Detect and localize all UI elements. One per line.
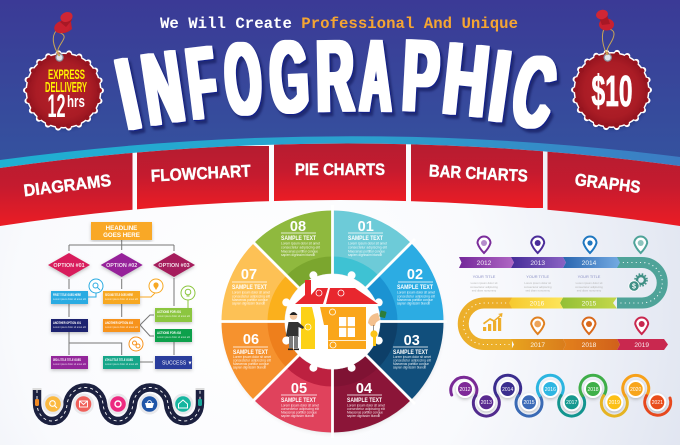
cars bbox=[35, 399, 202, 406]
flowchart bbox=[48, 222, 195, 369]
flowchart boxes: Lorem ipsum dolor sit amet elit bbox=[157, 335, 190, 339]
labels 04: 04 bbox=[356, 381, 372, 397]
snake arcs bbox=[451, 375, 671, 416]
labels 02 bbox=[397, 267, 435, 306]
circular pie chart bbox=[218, 205, 447, 438]
option diamonds: OPTION #03 bbox=[158, 263, 190, 269]
year disc labels: 2013 bbox=[481, 400, 492, 406]
labels 06: SAMPLE TEXT bbox=[233, 349, 268, 356]
bar segments bbox=[459, 257, 668, 350]
labels 03: Maecenas porttitor congue bbox=[393, 362, 429, 366]
labels 08 bbox=[281, 219, 320, 257]
ribbon labels bbox=[22, 160, 642, 200]
labels 06: Maecenas porttitor congue bbox=[233, 362, 269, 366]
segment 01 bbox=[332, 210, 411, 288]
year labels bbox=[477, 260, 649, 349]
flowchart boxes: Lorem ipsum dolor sit amet elit bbox=[105, 325, 138, 329]
labels 03: 03 bbox=[404, 333, 420, 349]
segment 03 bbox=[366, 322, 444, 400]
year disc labels: 2018 bbox=[587, 387, 599, 393]
title: INFOGRAPHIC: F bbox=[181, 25, 223, 141]
title: INFOGRAPHIC bbox=[107, 18, 564, 152]
title: INFOGRAPHIC: N bbox=[136, 30, 190, 148]
house roof bbox=[295, 280, 378, 304]
tag: price: $10 bbox=[592, 67, 632, 116]
flowchart boxes: ACTIONS FOR #02 bbox=[157, 331, 181, 335]
road dashes bbox=[37, 388, 200, 421]
headline box: HEADLINE bbox=[106, 225, 137, 232]
title: INFOGRAPHIC: P bbox=[400, 19, 442, 134]
labels 07: 07 bbox=[241, 267, 257, 283]
title: INFOGRAPHIC: I bbox=[483, 28, 517, 143]
flowchart boxes: Lorem ipsum dolor sit amet elit bbox=[105, 297, 138, 301]
your title captions: Lorem ipsum dolor sit bbox=[471, 281, 498, 285]
title: INFOGRAPHIC: H bbox=[438, 20, 494, 139]
blue header background bbox=[0, 0, 680, 166]
labels 07 bbox=[232, 267, 270, 306]
ribbon labels: BAR CHARTS bbox=[428, 161, 528, 186]
title: INFOGRAPHIC: A bbox=[360, 18, 392, 133]
your title captions: consectetur adipiscing bbox=[524, 285, 552, 289]
labels 02: consectetur adipiscing elit bbox=[397, 294, 435, 298]
labels 08: SAMPLE TEXT bbox=[281, 235, 316, 242]
headline box: GOES HERE bbox=[103, 232, 140, 239]
year disc labels: 2017 bbox=[566, 400, 577, 406]
flowchart boxes: SECOND TITLE GOES HERE bbox=[105, 293, 133, 297]
road timeline years 2012-2019 bbox=[459, 236, 668, 350]
labels 02: sapien dignissim blandit bbox=[397, 302, 430, 306]
labels 07: SAMPLE TEXT bbox=[232, 284, 267, 291]
flowchart boxes: ANOTHER OPTION #02 bbox=[105, 321, 133, 325]
segment 02 bbox=[366, 243, 444, 322]
teal road curve bbox=[617, 262, 662, 303]
labels 02: Lorem ipsum dolor sit amet bbox=[397, 290, 435, 294]
road bbox=[37, 388, 200, 421]
spiral year timeline bbox=[451, 375, 671, 416]
labels 05: Lorem ipsum dolor sit amet bbox=[281, 404, 319, 408]
labels 04 bbox=[347, 381, 385, 418]
tag: express delivery: hrs bbox=[67, 92, 85, 111]
labels 03: consectetur adipiscing elit bbox=[393, 358, 431, 362]
year disc labels bbox=[459, 387, 663, 406]
labels 03: SAMPLE TEXT bbox=[393, 349, 428, 356]
year disc labels: 2020 bbox=[630, 387, 641, 393]
house illustration bbox=[286, 280, 387, 350]
segment 07 bbox=[222, 243, 299, 322]
flowchart boxes: FIRST TITLE GOES HERE bbox=[53, 293, 81, 297]
year disc labels: 2015 bbox=[523, 400, 535, 406]
option diamonds: OPTION #01 bbox=[53, 263, 85, 269]
year disc labels: 2019 bbox=[609, 400, 620, 406]
labels 01 bbox=[348, 219, 387, 257]
orange road curve bbox=[463, 303, 512, 344]
tag: express delivery bbox=[26, 10, 102, 129]
road stubs bbox=[32, 388, 204, 400]
flowchart boxes: Lorem ipsum dolor sit amet elit bbox=[53, 325, 86, 329]
year labels: 2018 bbox=[582, 342, 597, 349]
icon callouts bbox=[88, 279, 195, 351]
flowchart boxes: SUCCESS ▼ bbox=[162, 360, 193, 366]
title: INFOGRAPHIC: R bbox=[315, 20, 355, 134]
year disc labels: 2021 bbox=[652, 400, 663, 406]
title: INFOGRAPHIC: C bbox=[503, 33, 564, 152]
your title captions: sed diam nonummy bbox=[577, 288, 602, 292]
year disc labels: 2012 bbox=[459, 387, 471, 393]
labels 07: Lorem ipsum dolor sit amet bbox=[232, 290, 270, 294]
ribbon panels bbox=[0, 142, 680, 228]
icon: money and gear bbox=[629, 274, 647, 291]
teal arc band bbox=[0, 136, 680, 168]
labels 04: SAMPLE TEXT bbox=[347, 397, 382, 404]
icon: growth bar chart bbox=[483, 313, 502, 331]
option diamonds bbox=[48, 253, 195, 277]
year labels: 2015 bbox=[582, 300, 597, 308]
labels 05: SAMPLE TEXT bbox=[281, 397, 316, 404]
flowchart boxes: ACTIONS FOR #01 bbox=[157, 310, 181, 314]
labels 06 bbox=[233, 332, 271, 370]
your title captions: sed diam nonummy bbox=[472, 288, 497, 292]
title: INFOGRAPHIC: O bbox=[220, 20, 266, 137]
flowchart connectors bbox=[69, 240, 174, 362]
businessman bbox=[286, 312, 304, 350]
labels 01: consectetur adipiscing elit bbox=[348, 246, 387, 250]
labels 04: Maecenas porttitor congue bbox=[347, 410, 383, 414]
year labels: 2016 bbox=[530, 300, 545, 308]
title: INFOGRAPHIC: G bbox=[267, 19, 311, 135]
center gear disc bbox=[282, 271, 383, 372]
title: INFOGRAPHIC: I bbox=[107, 36, 148, 151]
labels 04: Lorem ipsum dolor sit amet bbox=[347, 404, 385, 408]
labels 01: SAMPLE TEXT bbox=[348, 235, 383, 242]
tag: express delivery: DELLIVERY bbox=[45, 80, 87, 96]
ribbon labels: PIE CHARTS bbox=[295, 160, 385, 179]
segment 08 bbox=[254, 210, 332, 288]
headline box bbox=[91, 222, 152, 240]
segment 04 bbox=[332, 355, 411, 432]
your title captions: Lorem ipsum dolor sit bbox=[576, 281, 603, 285]
labels 01: 01 bbox=[358, 219, 374, 235]
labels 06: sapien dignissim blandit bbox=[233, 366, 266, 370]
labels 05: 05 bbox=[291, 381, 307, 397]
tag: express delivery: EXPRESS bbox=[48, 66, 85, 82]
ribbon labels: FLOWCHART bbox=[150, 161, 252, 186]
labels 06: Lorem ipsum dolor sit amet bbox=[233, 355, 271, 359]
labels 01: sapien dignissim blandit bbox=[348, 253, 382, 257]
year discs bbox=[457, 381, 665, 410]
hand holding key bbox=[368, 310, 387, 346]
your title captions: YOUR TITLE bbox=[526, 274, 550, 279]
road timeline bbox=[32, 388, 204, 421]
flowchart boxes: 3RD LITTLE TITLE GOES bbox=[53, 358, 82, 362]
labels 06: consectetur adipiscing elit bbox=[233, 358, 271, 362]
icon: money and gear: $ bbox=[632, 284, 636, 290]
labels 04: consectetur adipiscing elit bbox=[347, 407, 385, 411]
labels 01: Maecenas porttitor congue bbox=[348, 250, 385, 254]
year labels: 2012 bbox=[477, 260, 492, 267]
labels 05: consectetur adipiscing elit bbox=[281, 407, 319, 411]
labels 03: Lorem ipsum dolor sit amet bbox=[393, 355, 431, 359]
labels 08: Lorem ipsum dolor sit amet bbox=[281, 242, 320, 246]
segment 06 bbox=[222, 322, 299, 400]
year labels: 2019 bbox=[634, 342, 649, 349]
ribbon labels: DIAGRAMS bbox=[22, 171, 112, 200]
your title captions: YOUR TITLE bbox=[473, 274, 496, 279]
inner darker bands bbox=[267, 256, 398, 387]
year disc labels: 2014 bbox=[502, 387, 513, 393]
location pins bbox=[478, 236, 648, 334]
icon: push pin left bbox=[52, 10, 74, 35]
year labels: 2017 bbox=[530, 342, 545, 349]
flowchart boxes: Lorem ipsum dolor sit amet elit bbox=[53, 297, 86, 301]
labels 08: Maecenas porttitor congue bbox=[281, 250, 318, 254]
tag: express delivery: 12 bbox=[48, 88, 66, 124]
labels 06: 06 bbox=[243, 332, 259, 348]
year disc labels: 2016 bbox=[545, 387, 556, 393]
tag: price bbox=[574, 9, 650, 129]
labels 05: sapien dignissim blandit bbox=[281, 414, 314, 418]
tagline: We Will Create Professional And Unique bbox=[160, 15, 518, 33]
flowchart boxes: Lorem ipsum dolor sit amet elit bbox=[53, 362, 86, 366]
labels 08: sapien dignissim blandit bbox=[281, 253, 315, 257]
segment 05 bbox=[254, 355, 332, 432]
labels 02: Maecenas porttitor congue bbox=[397, 298, 433, 302]
flowchart boxes: Lorem ipsum dolor sit amet elit bbox=[105, 362, 138, 366]
labels 03: sapien dignissim blandit bbox=[393, 366, 426, 370]
flowchart boxes: Lorem ipsum dolor sit amet elit bbox=[157, 314, 190, 318]
road stop icons bbox=[42, 394, 194, 414]
labels 08: 08 bbox=[290, 219, 306, 235]
labels 07: consectetur adipiscing elit bbox=[232, 294, 270, 298]
year labels: 2014 bbox=[582, 260, 597, 267]
labels 02: 02 bbox=[407, 267, 423, 283]
your title captions: YOUR TITLE bbox=[578, 274, 601, 279]
labels 05: Maecenas porttitor congue bbox=[281, 410, 317, 414]
labels 07: Maecenas porttitor congue bbox=[232, 298, 268, 302]
your title captions: Lorem ipsum dolor sit bbox=[524, 281, 551, 285]
labels 07: sapien dignissim blandit bbox=[232, 302, 265, 306]
flowchart boxes: 4TH LITTLE TITLE GOES bbox=[105, 358, 134, 362]
year labels: 2013 bbox=[530, 260, 545, 267]
flowchart boxes bbox=[51, 291, 193, 369]
labels 02: SAMPLE TEXT bbox=[397, 284, 433, 291]
house walls bbox=[301, 290, 366, 349]
your title captions: consectetur adipiscing bbox=[575, 285, 603, 289]
icon: push pin right bbox=[595, 9, 614, 30]
labels 05 bbox=[281, 381, 319, 418]
wheel shadow bbox=[222, 212, 444, 433]
flowchart boxes: ANOTHER OPTION #01 bbox=[53, 321, 81, 325]
labels 04: sapien dignissim blandit bbox=[347, 414, 380, 418]
ribbon labels: GRAPHS bbox=[574, 170, 642, 197]
your title captions: sed diam nonummy bbox=[525, 288, 551, 292]
labels 03 bbox=[393, 333, 431, 370]
labels 01: Lorem ipsum dolor sit amet bbox=[348, 242, 387, 246]
labels 08: consectetur adipiscing elit bbox=[281, 246, 320, 250]
your title captions: consectetur adipiscing bbox=[470, 285, 498, 289]
option diamonds: OPTION #02 bbox=[106, 263, 137, 269]
your title captions bbox=[470, 274, 603, 292]
